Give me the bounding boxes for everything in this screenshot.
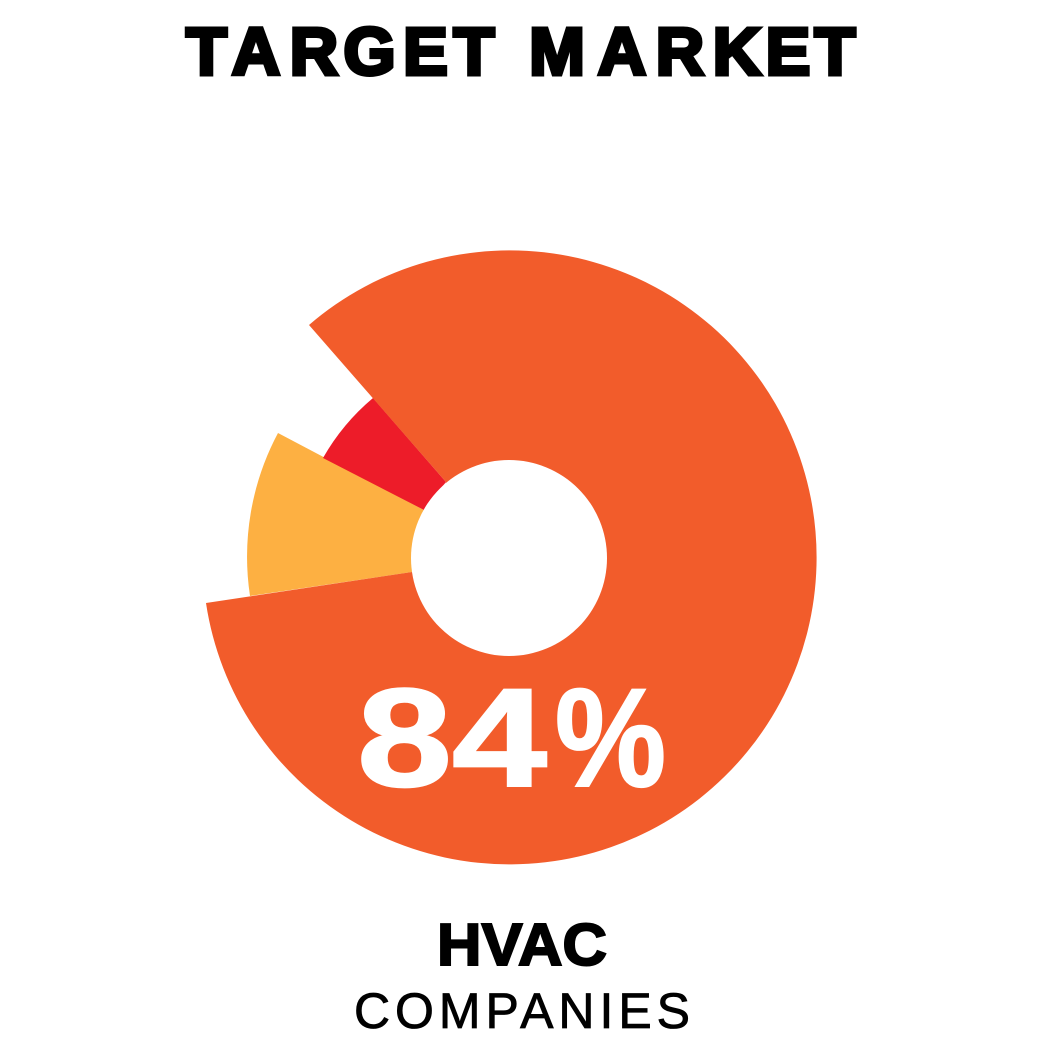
value: 84%: 84 (357, 659, 547, 816)
segment: yellow (247, 433, 424, 596)
value: 84%: % (555, 659, 666, 816)
value: 84% (357, 659, 666, 816)
title: TARGET MARKET (186, 14, 856, 90)
donut hole (411, 460, 607, 656)
segment: red (323, 398, 446, 510)
label: HVAC: HVAC (437, 912, 607, 978)
segment: orange 84% (206, 250, 817, 864)
label: COMPANIES: COMPANIES (354, 983, 690, 1039)
donut chart (206, 250, 817, 864)
